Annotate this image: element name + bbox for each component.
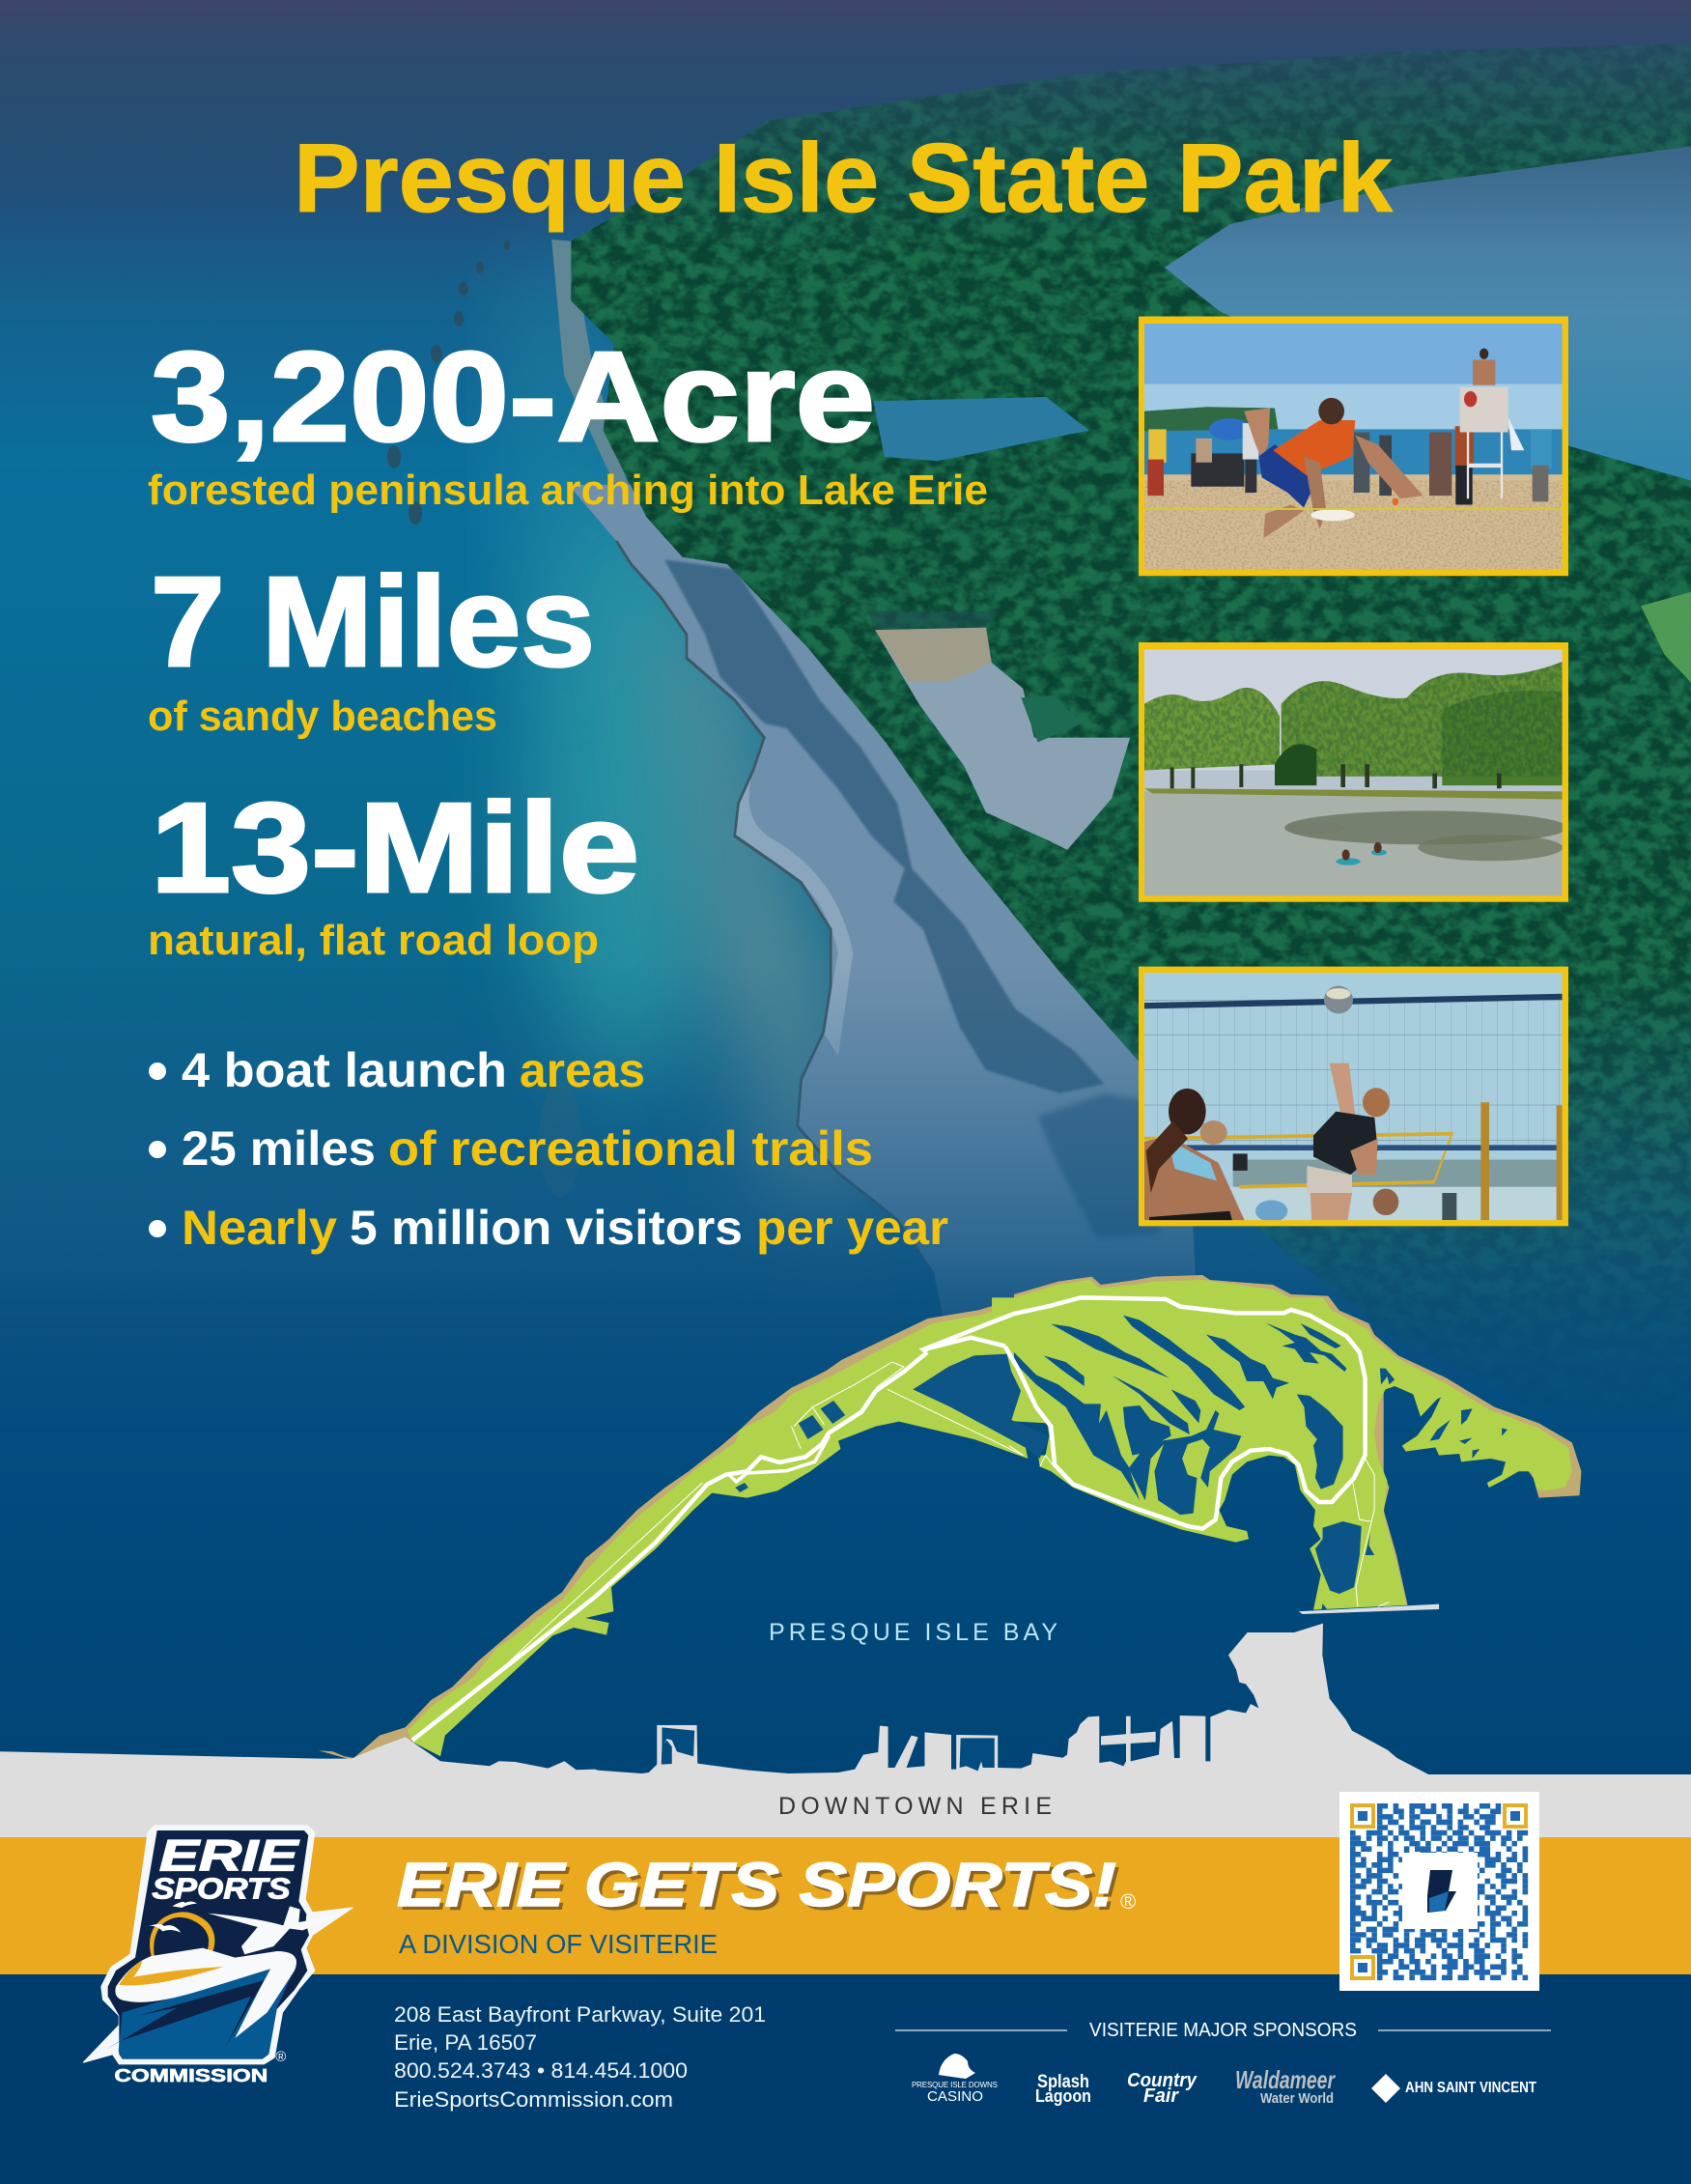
bullet list: per year — [756, 1201, 948, 1255]
map: Misery Bay and ponds — [735, 1354, 1049, 1492]
contact details: 800.524.3743 • 814.454.1000 — [394, 2058, 688, 2083]
stat: 3,200-Acre: forested peninsula arching into Lake Erie — [148, 467, 988, 514]
gray land and downtown skyline — [0, 1624, 1691, 1837]
logo: Erie Sports Commission: ERIE — [159, 1831, 300, 1881]
stat: 13-Mile: natural, flat road loop — [148, 917, 599, 964]
logo: Erie Sports Commission — [84, 1826, 352, 2085]
beach sand — [569, 485, 1208, 1524]
bullet list: Nearly — [182, 1201, 337, 1255]
sponsor: Splash Lagoon: Lagoon — [1035, 2086, 1091, 2106]
photo: beach volleyball — [1139, 967, 1568, 1226]
stat: 7 Miles: of sandy beaches — [148, 693, 497, 740]
photo: kayaks and island trees — [1139, 642, 1568, 902]
stat: 3,200-Acre: 3,200-Acre — [151, 326, 875, 468]
map: peninsula land — [408, 1280, 1572, 1756]
bullet list: of recreational trails — [388, 1121, 873, 1176]
slogan: ERIE GETS SPORTS! — [401, 1854, 1120, 1923]
map: west park roads — [412, 1352, 1023, 1741]
slogan: ® — [1120, 1889, 1136, 1914]
label: Presque Isle Bay: PRESQUE ISLE BAY — [769, 1619, 1057, 1646]
sponsor: Waldameer: Waldameer — [1235, 2065, 1336, 2094]
sponsor: Presque Isle Downs Casino — [912, 2054, 998, 2105]
beach clearing and tree shadows — [664, 559, 1159, 1238]
stat: 13-Mile — [148, 777, 639, 964]
QR code — [1339, 1792, 1539, 1991]
map: east park roads — [979, 1297, 1439, 1614]
sponsor: Waldameer: Water World — [1260, 2090, 1334, 2107]
bullet list: 25 miles — [182, 1121, 376, 1176]
slogan: ERIE GETS SPORTS! — [397, 1850, 1116, 1919]
logo: Erie Sports Commission: SPORTS — [152, 1873, 291, 1906]
sponsor: Country Fair: Country — [1127, 2070, 1198, 2091]
bullet list: 5 million visitors — [350, 1201, 743, 1255]
photo: beach disc player — [1139, 317, 1568, 576]
sponsors heading: VISITERIE MAJOR SPONSORS — [1089, 2020, 1357, 2041]
breakwater rocks — [387, 241, 581, 1198]
stat: 13-Mile: 13-Mile — [151, 777, 639, 919]
sponsor: Presque Isle Downs Casino: CASINO — [927, 2088, 983, 2105]
map: west shore sand — [319, 1275, 1581, 1761]
sponsor: Waldameer — [1235, 2065, 1336, 2107]
navy footer — [0, 1974, 1691, 2184]
sponsor: AHN Saint Vincent — [1371, 2074, 1536, 2103]
sponsor: Splash Lagoon: Splash — [1037, 2072, 1089, 2092]
stat: 3,200-Acre — [148, 326, 988, 514]
sponsor: Presque Isle Downs Casino: PRESQUE ISLE DOWNS — [912, 2081, 998, 2089]
label: Downtown Erie: DOWNTOWN ERIE — [778, 1793, 1052, 1820]
contact details — [394, 2002, 766, 2112]
logo: Erie Sports Commission: COMMISSION — [114, 2065, 268, 2085]
title: Presque Isle State Park — [294, 125, 1394, 233]
bullet list — [149, 1043, 948, 1255]
bullet list: areas — [520, 1043, 645, 1097]
sponsor: Country Fair — [1127, 2070, 1198, 2107]
sponsor: Country Fair: Fair — [1143, 2085, 1179, 2107]
contact details: Erie, PA 16507 — [394, 2030, 537, 2055]
contact details: ErieSportsCommission.com — [394, 2087, 673, 2112]
map: north park roads — [923, 1327, 1005, 1352]
map: lagoons — [1014, 1316, 1508, 1610]
bullet list: 4 boat launch — [182, 1043, 507, 1097]
contact details: 208 East Bayfront Parkway, Suite 201 — [394, 2002, 766, 2027]
division line: A DIVISION OF VISITERIE — [399, 1929, 718, 1959]
map: Presque Isle peninsula — [319, 1275, 1581, 1761]
sponsor: AHN Saint Vincent: AHN SAINT VINCENT — [1405, 2080, 1536, 2096]
stat: 7 Miles: 7 Miles — [151, 551, 595, 693]
forest canopy — [0, 0, 1691, 1421]
sponsor: Splash Lagoon — [1035, 2072, 1091, 2106]
logo: Erie Sports Commission: ® — [275, 2050, 286, 2065]
gold band — [0, 1837, 1691, 1974]
